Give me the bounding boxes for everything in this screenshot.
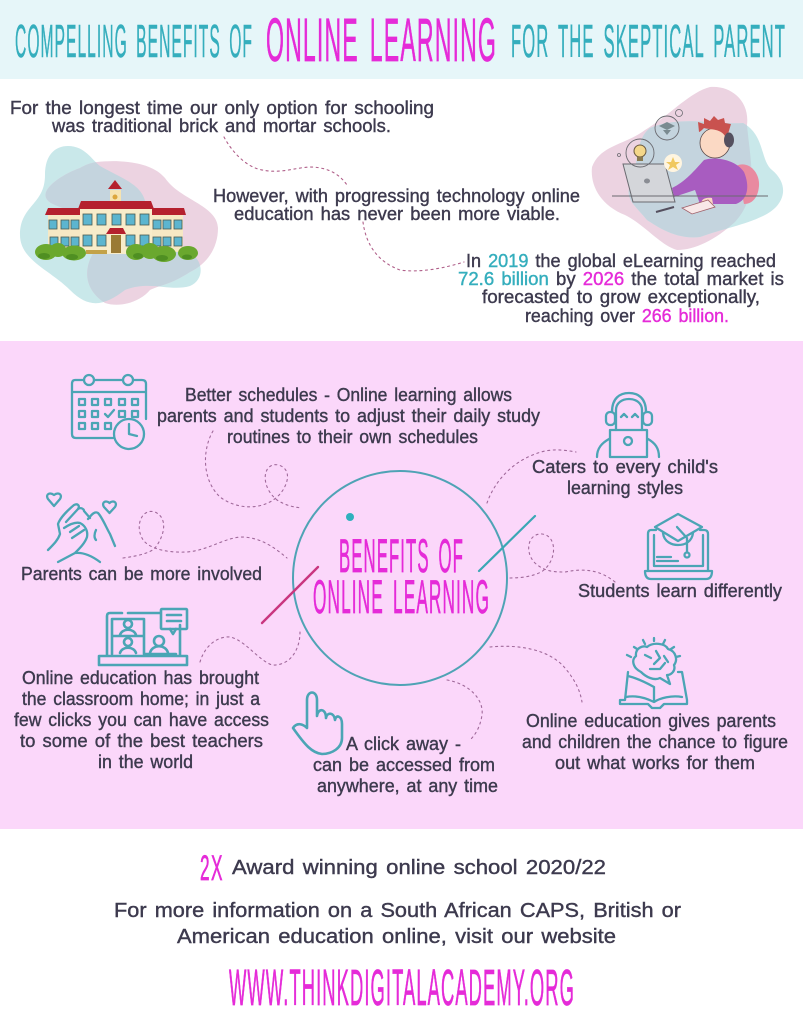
text: click away: can be accessed from (313, 754, 495, 775)
text: better schedules (157, 384, 541, 447)
connector: learning styles (487, 450, 576, 503)
text: classroom home: Online education has brought (22, 667, 259, 688)
text: learning styles: Caters to every child's (532, 456, 718, 477)
text: better schedules: routines to their own schedules (227, 426, 478, 447)
text: figure out (522, 710, 788, 773)
connector: click away (447, 680, 482, 740)
text: click away: anywhere, at any time (317, 775, 498, 796)
text: longest time: For the longest time our only option for schooling (10, 97, 434, 118)
text: more information: For more information on a South African CAPS, British or (114, 899, 681, 922)
header band (0, 0, 803, 79)
icon: brain and book (620, 638, 687, 708)
title (15, 6, 786, 74)
award line: 2X (200, 849, 224, 888)
icon: clapping hands (47, 494, 116, 562)
award line: Award winning online school 2020/22 (232, 856, 606, 879)
text: market forecast: forecasted to grow exceptionally, (482, 286, 760, 307)
connector: better schedules (205, 431, 302, 508)
connector: students learn (510, 534, 615, 582)
icon: video classroom (99, 609, 187, 665)
text: market forecast: 72.6 billion by 2026 the total market is (458, 268, 784, 289)
text: students learn differently: Students learn differently (578, 580, 783, 601)
central circle (262, 471, 535, 685)
connector: classroom home (200, 632, 300, 665)
text: figure out: Online education gives parents (526, 710, 776, 731)
text: parents involved: Parents can be more involved (21, 563, 262, 584)
text: progressing technology (213, 185, 580, 224)
infographic: ONLINE LEARNING (313, 570, 490, 623)
connector: parents involved (123, 511, 287, 558)
text: better schedules: parents and students to adjust their daily study (157, 405, 541, 426)
accent line: teal (479, 516, 535, 571)
text: click away: A click away - (346, 733, 461, 754)
text: market forecast: In 2019 the global eLearning reached (466, 250, 776, 271)
award line (200, 849, 606, 888)
dot (346, 513, 354, 521)
icon: pointing hand (293, 692, 342, 754)
text: progressing technology: education has never been more viable. (234, 203, 560, 224)
text: progressing technology: However, with progressing technology online (213, 185, 580, 206)
illustration: school (20, 146, 218, 305)
text: figure out: out what works for them (555, 752, 755, 773)
text: market forecast: reaching over 266 billion. (525, 305, 729, 326)
icon: calendar (72, 375, 146, 449)
text: longest time (10, 97, 434, 136)
text: learning styles (532, 456, 718, 498)
text: more information (114, 899, 681, 948)
text: classroom home (14, 667, 269, 772)
connector: technology to market (363, 222, 464, 271)
panel: benefits (0, 341, 803, 829)
accent line: pink (262, 567, 318, 623)
illustration: student (592, 87, 783, 250)
text: classroom home: few clicks you can have access (14, 709, 269, 730)
icon: graduation laptop (645, 514, 712, 579)
text: market forecast (458, 250, 784, 326)
text: classroom home: to some of the best teachers (20, 730, 263, 751)
title: COMPELLING BENEFITS OF (15, 15, 253, 67)
connector: schooling to technology (224, 137, 347, 185)
text: longest time: was traditional brick and mortar schools. (51, 115, 391, 136)
text: click away (313, 733, 498, 796)
text: better schedules: Better schedules - Online learning allows (185, 384, 512, 405)
circle heading (313, 529, 490, 623)
connector: figure out (490, 646, 582, 702)
text: classroom home: in the world (98, 751, 193, 772)
icon: headset robot (597, 393, 659, 457)
text: more information: American education online, visit our website (177, 925, 616, 948)
text: classroom home: the classroom home; in just a (22, 688, 261, 709)
text: learning styles: learning styles (567, 477, 683, 498)
text: figure out: and children the chance to figure (522, 731, 788, 752)
central circle: BENEFITS OF (339, 529, 464, 582)
